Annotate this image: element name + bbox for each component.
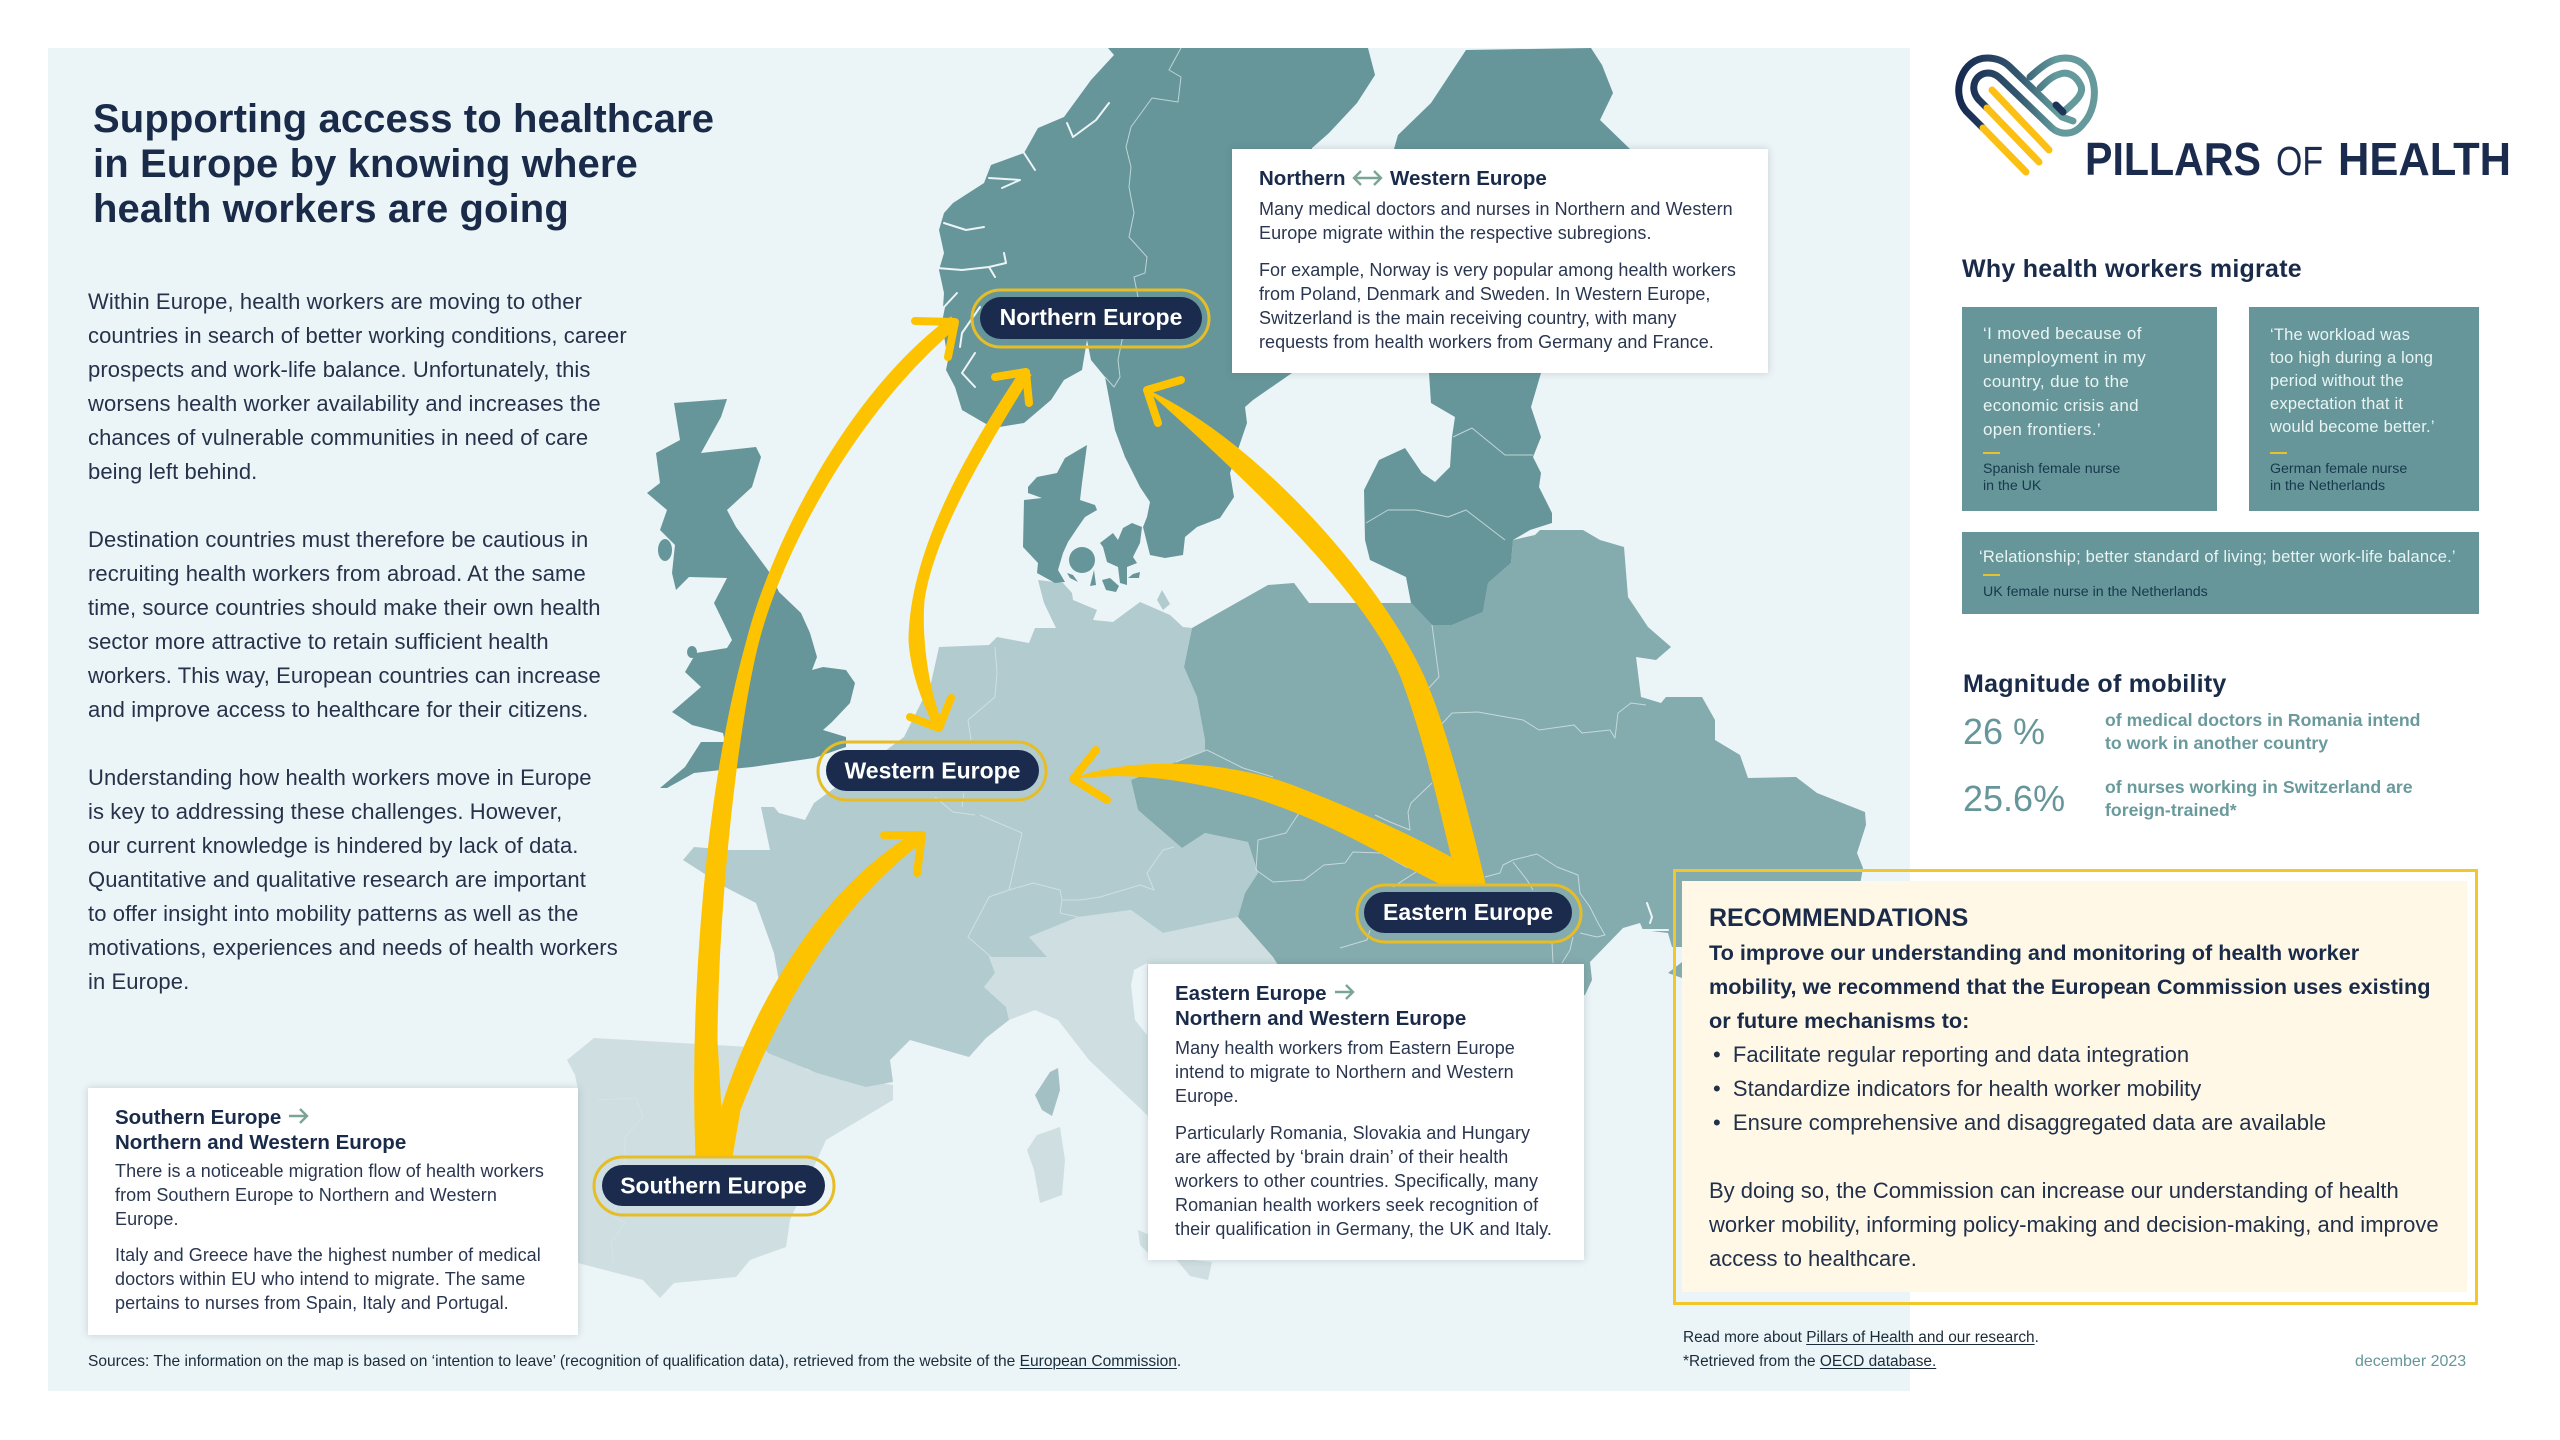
recommendations box (1673, 869, 2478, 1305)
recommendations bullets (1713, 1042, 2326, 1135)
stat: 25.6 percent: 25.6% (1963, 778, 2065, 819)
date: december 2023 (2355, 1353, 2466, 1370)
card text (115, 1161, 544, 1229)
card text: from Southern Europe to Northern and Western (115, 1185, 497, 1205)
quote text (1983, 324, 2146, 439)
card text: For example, Norway is very popular among health workers (1259, 260, 1736, 280)
map: fjords and inlets (937, 103, 1668, 930)
intro text: is key to addressing these challenges. However, (88, 799, 562, 824)
card text: their qualification in Germany, the UK and Italy. (1175, 1219, 1552, 1239)
pill: Northern Europe: Northern Europe (1000, 304, 1182, 330)
stat text: doctors in Romania (2105, 710, 2420, 752)
arrow: Southern to Northern Europe (695, 317, 958, 1157)
attribution (2270, 461, 2407, 494)
intro text: Destination countries must therefore be cautious in (88, 527, 588, 552)
recommendations intro (1709, 940, 2430, 1033)
heading: magnitude of mobility: Magnitude of mobility (1963, 670, 2227, 698)
card heading with arrow: Northern and Western Europe (1175, 1007, 1466, 1030)
card: Eastern Europe to Northern and Western Europe (1148, 964, 1584, 1260)
title: health workers are going (93, 187, 569, 231)
intro text: chances of vulnerable communities in need of care (88, 425, 588, 450)
card heading with arrow: Northern and Western Europe (115, 1131, 406, 1154)
stat text: doctors in Romania: of medical doctors in Romania intend (2105, 710, 2420, 730)
panel: map background (48, 48, 1910, 1391)
card text (1175, 1123, 1552, 1239)
attribution: in the Netherlands (2270, 478, 2385, 494)
quote text: unemployment in my (1983, 348, 2146, 367)
title: Supporting access to healthcare (93, 97, 714, 141)
recommendations intro: or future mechanisms to: (1709, 1008, 1969, 1033)
yellow dash (2270, 452, 2287, 454)
read more note: Read more about Pillars of Health and our research. (1683, 1329, 2039, 1346)
card heading with arrow (115, 1106, 406, 1154)
card heading with arrow: Eastern Europe (1175, 982, 1327, 1005)
intro text: workers. This way, European countries can increase (88, 663, 601, 688)
card heading with two-way arrow: Western Europe (1390, 167, 1547, 190)
pill: Southern Europe: Southern Europe (620, 1172, 807, 1198)
card heading with arrow (1175, 982, 1466, 1030)
arrow: Southern to Western Europe (705, 831, 925, 1157)
card: Southern Europe to Northern and Western Europe (88, 1088, 578, 1335)
intro text: Quantitative and qualitative research are important (88, 867, 586, 892)
attribution: UK female nurse in the Netherlands (1983, 584, 2208, 600)
card text (115, 1245, 541, 1313)
read more note (1683, 1329, 2039, 1370)
cream panel (1682, 881, 2467, 1292)
card text: Europe migrate within the respective subregions. (1259, 223, 1652, 243)
card heading with two-way arrow: Northern (1259, 167, 1346, 190)
recommendations bullets: • Facilitate regular reporting and data integration (1713, 1042, 2189, 1067)
intro text: our current knowledge is hindered by lack of data. (88, 833, 579, 858)
card text: from Poland, Denmark and Sweden. In Western Europe, (1259, 284, 1710, 304)
stat text: nurses in Switzerland: foreign-trained* (2105, 800, 2237, 820)
intro text: in Europe. (88, 969, 189, 994)
card: Northern and Western Europe (1232, 149, 1768, 373)
attribution: German female nurse (2270, 461, 2407, 477)
card text: There is a noticeable migration flow of health workers (115, 1161, 544, 1181)
recommendations closing: By doing so, the Commission can increase our understanding of health (1709, 1178, 2399, 1203)
pill: Western Europe (818, 742, 1046, 800)
recommendations intro: To improve our understanding and monitoring of health worker (1709, 940, 2359, 965)
stat text: nurses in Switzerland (2105, 776, 2413, 820)
recommendations bullets: • Ensure comprehensive and disaggregated data are available (1713, 1110, 2326, 1135)
pill: Eastern Europe (1357, 885, 1581, 942)
map: southern Europe (567, 910, 1278, 1298)
pill: Northern Europe (972, 290, 1209, 347)
card text: Romanian health workers seek recognition of (1175, 1195, 1538, 1215)
logo wordmark: PILLARS (2085, 133, 2261, 185)
intro text (88, 289, 627, 994)
sources note: Sources: The information on the map is based on ‘intention to leave’ (recognition of qualification data), retrieved from the website of the European Commission. (88, 1353, 1181, 1370)
intro text: and improve access to healthcare for their citizens. (88, 697, 588, 722)
quote text (2270, 326, 2435, 436)
intro text: countries in search of better working conditions, career (88, 323, 627, 348)
intro text: to offer insight into mobility patterns as well as the (88, 901, 578, 926)
quote text: economic crisis and (1983, 396, 2139, 415)
pill: Eastern Europe: Eastern Europe (1383, 899, 1553, 925)
arrow: Northern and Western Europe both ways (909, 369, 1031, 728)
quote text: open frontiers.’ (1983, 420, 2101, 439)
icon: Pillars of Health heart logo (1959, 58, 2094, 172)
quote text: expectation that it (2270, 394, 2403, 412)
attribution: in the UK (1983, 478, 2041, 494)
recommendations bullets: • Standardize indicators for health worker mobility (1713, 1076, 2201, 1101)
card text: Europe. (115, 1209, 179, 1229)
card text: Many medical doctors and nurses in Northern and Western (1259, 199, 1733, 219)
card text: Europe. (1175, 1086, 1239, 1106)
quote: Spanish nurse (1962, 307, 2217, 511)
intro text: Understanding how health workers move in Europe (88, 765, 592, 790)
map: eastern Europe (1131, 530, 1866, 1010)
recommendations closing: worker mobility, informing policy-making and decision-making, and improve (1709, 1212, 2439, 1237)
map: countries (567, 48, 1866, 1300)
card text (1175, 1038, 1515, 1106)
card heading with arrow: Southern Europe (115, 1106, 281, 1129)
intro text: prospects and work-life balance. Unfortunately, this (88, 357, 590, 382)
intro text: recruiting health workers from abroad. At the same (88, 561, 586, 586)
pill: Western Europe: Western Europe (845, 758, 1020, 784)
intro text: being left behind. (88, 459, 257, 484)
map: country borders (934, 48, 1646, 964)
card text: Many health workers from Eastern Europe (1175, 1038, 1515, 1058)
logo wordmark (2085, 133, 2511, 185)
title (93, 97, 714, 231)
quote text: ‘I moved because of (1983, 324, 2142, 343)
map of Europe with migration arrows (567, 48, 2508, 1298)
card text (1259, 260, 1736, 352)
logo wordmark: HEALTH (2338, 133, 2511, 185)
intro text: motivations, experiences and needs of health workers (88, 935, 618, 960)
card text (1259, 199, 1733, 243)
card text: are affected by ‘brain drain’ of their health (1175, 1147, 1508, 1167)
intro text: worsens health worker availability and increases the (88, 391, 601, 416)
quote text: period without the (2270, 372, 2404, 390)
arrows: migration flows (695, 317, 1485, 1157)
quote: UK nurse (1962, 532, 2479, 614)
arrow: Eastern to Northern Europe (1147, 380, 1485, 883)
stat text: doctors in Romania: to work in another country (2105, 732, 2328, 752)
quote text: too high during a long (2270, 348, 2433, 366)
card heading with two-way arrow (1259, 167, 1547, 190)
card text: Italy and Greece have the highest number of medical (115, 1245, 541, 1265)
card text: intend to migrate to Northern and Western (1175, 1062, 1514, 1082)
card text: Switzerland is the main receiving country, with many (1259, 308, 1676, 328)
recommendations closing (1709, 1178, 2439, 1271)
intro text: Within Europe, health workers are moving to other (88, 289, 582, 314)
card text: Particularly Romania, Slovakia and Hungary (1175, 1123, 1530, 1143)
heading: why health workers migrate: Why health workers migrate (1962, 255, 2302, 283)
recommendations heading: RECOMMENDATIONS (1709, 904, 1968, 932)
quote text: would become better.’ (2270, 418, 2435, 436)
stat text: nurses in Switzerland: of nurses working in Switzerland are (2105, 776, 2413, 796)
quote text: ‘Relationship; better standard of living; better work-life balance.’ (1979, 548, 2456, 566)
card text: requests from health workers from Germany and France. (1259, 332, 1714, 352)
stat: 26 percent: 26 % (1963, 711, 2045, 752)
intro text: time, source countries should make their own health (88, 595, 601, 620)
logo wordmark: OF (2276, 138, 2323, 184)
card text: workers to other countries. Specifically, many (1175, 1171, 1538, 1191)
quote text: country, due to the (1983, 372, 2129, 391)
read more note: *Retrieved from the OECD database. (1683, 1353, 1936, 1370)
quote text: ‘The workload was (2270, 326, 2410, 344)
yellow dash (1983, 452, 2000, 454)
intro text: sector more attractive to retain sufficient health (88, 629, 549, 654)
map: western Europe (683, 580, 1258, 1116)
recommendations intro: mobility, we recommend that the European Commission uses existing (1709, 974, 2430, 999)
map: northern Europe (647, 48, 1630, 788)
attribution: Spanish female nurse (1983, 461, 2120, 477)
quote: German nurse (2249, 307, 2479, 511)
attribution (1983, 461, 2120, 494)
recommendations closing: access to healthcare. (1709, 1246, 1917, 1271)
pill: Southern Europe (594, 1157, 834, 1215)
card text: doctors within EU who intend to migrate. The same (115, 1269, 525, 1289)
arrow: Eastern to Western Europe (1073, 750, 1470, 885)
title: in Europe by knowing where (93, 142, 638, 186)
yellow dash (1983, 574, 2000, 576)
card text: pertains to nurses from Spain, Italy and Portugal. (115, 1293, 509, 1313)
